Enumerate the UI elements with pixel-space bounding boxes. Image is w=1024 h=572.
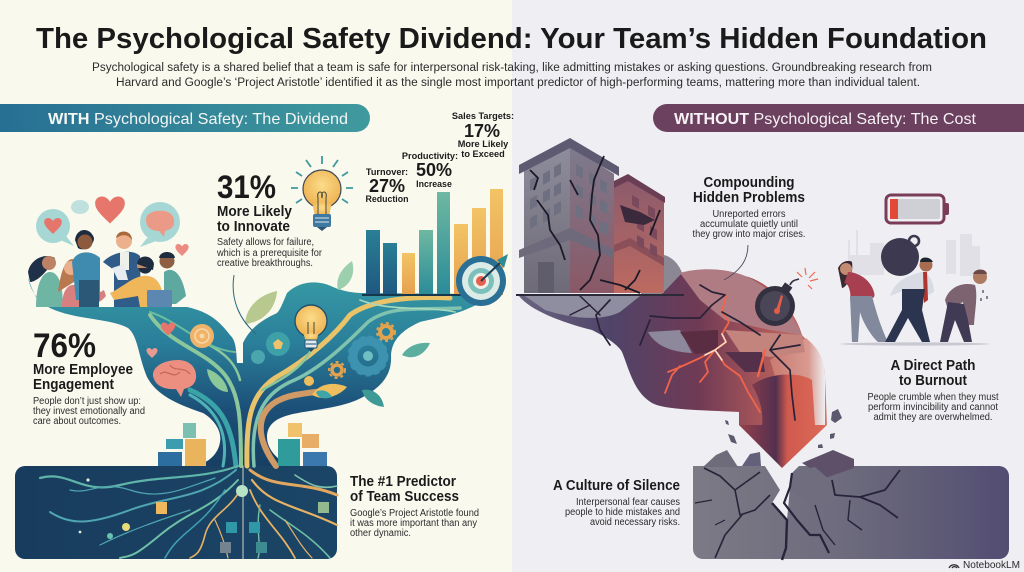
text: direct path to burnout: admit they are overwhelmed.	[874, 412, 992, 423]
background: left half	[0, 0, 512, 572]
text: culture of silence: A Culture of Silence	[553, 478, 680, 494]
faded skyline	[848, 230, 980, 276]
person: left woman	[28, 256, 62, 307]
tree canopy	[15, 277, 478, 559]
text: number one predictor: The #1 Predictor	[350, 474, 456, 490]
text: compounding hidden problems: Compounding	[704, 175, 794, 191]
foundation blocks: left stack	[158, 423, 206, 466]
crack wedge	[763, 463, 802, 520]
glowing cracks	[570, 285, 800, 420]
text: culture of silence: people to hide mistakes and	[565, 507, 680, 518]
intro text: Harvard and Google’s ‘Project Aristotle’ identified it as the single most important predictor of high-performing teams, mattering more than individual talent.	[116, 77, 920, 89]
text: compounding hidden problems: Unreported errors	[712, 209, 786, 220]
cracked foundation slab	[693, 450, 1009, 560]
person: man in navy	[103, 231, 141, 307]
panel heading: with psychological safety: WITH Psychological Safety: The Dividend	[48, 111, 348, 128]
person: bearded man in yellow	[110, 256, 163, 307]
stat: 76 percent engagement: Engagement	[33, 377, 114, 393]
text: compounding hidden problems: they grow into major crises.	[692, 229, 806, 240]
title: The Psychological Safety Dividend: Your Team’s Hidden Foundation	[36, 23, 987, 55]
text: number one predictor: of Team Success	[350, 489, 459, 505]
stat: 31 percent innovate: 31%	[217, 169, 276, 205]
tall building	[519, 138, 619, 293]
ground shadow under people	[840, 342, 990, 346]
icon: brain on tree	[153, 360, 196, 397]
icon: blue idea node on tree	[251, 332, 290, 364]
building illustration	[519, 138, 665, 293]
icon: target and arrow	[456, 254, 508, 306]
roots	[40, 466, 337, 559]
thin stem line	[233, 275, 256, 334]
text: direct path to burnout: People crumble when they must	[868, 392, 999, 403]
stat: sales targets: 17%	[464, 121, 500, 141]
icon: heavy ball burden	[881, 236, 919, 276]
icon: small heart on tree	[146, 348, 158, 358]
intro text: Psychological safety is a shared belief that a team is safe for interpersonal risk-taking, like admitting mistakes or asking questions. Groundbreaking research from	[92, 62, 932, 74]
text: number one predictor: other dynamic.	[350, 528, 411, 539]
stat: turnover	[365, 167, 409, 204]
speech bubble with heart	[36, 209, 74, 246]
icon: leaf above tree	[245, 291, 277, 324]
downward arrow	[739, 375, 827, 468]
stat: 76 percent engagement: 76%	[33, 327, 96, 365]
stat: 76 percent engagement: they invest emotionally and	[33, 406, 145, 417]
stat: 76 percent engagement: More Employee	[33, 362, 133, 378]
person: slumped man	[940, 270, 987, 342]
person: man on right	[159, 252, 186, 304]
stat: 31 percent innovate: creative breakthroughs.	[217, 258, 313, 269]
panel heading: with psychological safety	[0, 104, 370, 132]
callout line to crack	[724, 245, 748, 280]
people scene	[28, 196, 189, 307]
text: number one predictor: it was more important than any	[350, 518, 477, 529]
stat: 31 percent innovate	[216, 169, 323, 269]
icon: green leaf on tree	[207, 369, 228, 392]
text: culture of silence: Interpersonal fear causes	[576, 497, 680, 508]
person: man carrying ball	[885, 258, 934, 342]
stat: sales targets: Sales Targets:	[452, 111, 514, 121]
large heart	[95, 196, 125, 224]
text: number one predictor: Google’s Project Aristotle found	[350, 508, 479, 519]
icon: low battery	[886, 195, 949, 223]
stat: 76 percent engagement: care about outcomes.	[33, 416, 121, 427]
text: compounding hidden problems: Hidden Problems	[693, 190, 805, 206]
root panel	[15, 466, 337, 559]
stat: sales targets: to Exceed	[461, 149, 505, 159]
text: compounding hidden problems	[692, 175, 806, 240]
text: number one predictor	[350, 474, 479, 539]
icon: target medallion on tree	[190, 324, 214, 348]
background: right half	[512, 0, 1024, 572]
intro text	[92, 62, 932, 89]
person: woman head in hands	[838, 261, 888, 342]
text: direct path to burnout	[868, 358, 999, 423]
small chat bubble	[71, 200, 89, 214]
text: culture of silence: avoid necessary risks.	[590, 517, 680, 528]
panel heading: without psychological safety: WITHOUT Psychological Safety: The Cost	[674, 111, 977, 128]
text: culture of silence	[553, 478, 680, 528]
icon: leaf upper right	[337, 261, 353, 290]
stat: sales targets	[452, 111, 514, 159]
icon: leaf at right of tree	[402, 343, 430, 357]
icon: small gold gear lower	[329, 362, 345, 378]
icon: heart on tree	[161, 322, 175, 336]
stat: productivity: Productivity:	[402, 151, 458, 161]
icon: large gear on tree	[349, 337, 387, 375]
text: direct path to burnout: A Direct Path	[890, 358, 976, 374]
stat: 76 percent engagement	[33, 327, 145, 427]
stat: productivity: 50%	[416, 160, 452, 180]
laptop	[147, 290, 172, 307]
speech bubble with brain	[140, 202, 180, 247]
small heart right	[175, 244, 189, 256]
stat: 31 percent innovate: More Likely	[217, 204, 292, 220]
person: standing woman	[72, 230, 100, 307]
stat: sales targets: More Likely	[458, 139, 509, 149]
icon: lightbulb on tree	[295, 305, 327, 352]
foundation blocks: right stack	[278, 423, 327, 466]
text: direct path to burnout: perform invincibility and cannot	[868, 402, 998, 413]
stat: 76 percent engagement: People don’t just show up:	[33, 396, 141, 407]
icon: leaf lower right	[362, 390, 384, 407]
stat: productivity: Increase	[416, 179, 452, 189]
tree trunks and branches	[150, 298, 460, 466]
building cracks	[530, 156, 660, 293]
stat: turnover: Reduction	[365, 194, 409, 204]
watermark: NotebookLM: NotebookLM	[963, 559, 1020, 571]
panel heading: without psychological safety	[653, 104, 1024, 132]
ground line	[516, 294, 684, 296]
cracked ground flow to arrow	[519, 255, 827, 425]
stat: 31 percent innovate: which is a prerequisite for	[216, 248, 323, 259]
person: woman in pink	[58, 259, 106, 307]
root nodes	[79, 478, 329, 553]
chart: bar chart	[362, 189, 503, 296]
icon: leaf and swirl on tree	[304, 376, 347, 398]
icon: lightbulb	[291, 156, 353, 231]
short building	[614, 174, 665, 293]
stat: 31 percent innovate: to Innovate	[217, 219, 290, 235]
stat: 31 percent innovate: Safety allows for failure,	[217, 237, 314, 248]
stat: turnover: 27%	[369, 176, 405, 196]
text: direct path to burnout: to Burnout	[899, 373, 967, 389]
icon: bomb	[755, 268, 818, 326]
debris	[725, 409, 842, 448]
stat: productivity	[402, 151, 458, 189]
stat: turnover: Turnover:	[366, 167, 408, 177]
icon: small gold gear top	[377, 323, 395, 341]
text: compounding hidden problems: accumulate quietly until	[700, 219, 798, 230]
